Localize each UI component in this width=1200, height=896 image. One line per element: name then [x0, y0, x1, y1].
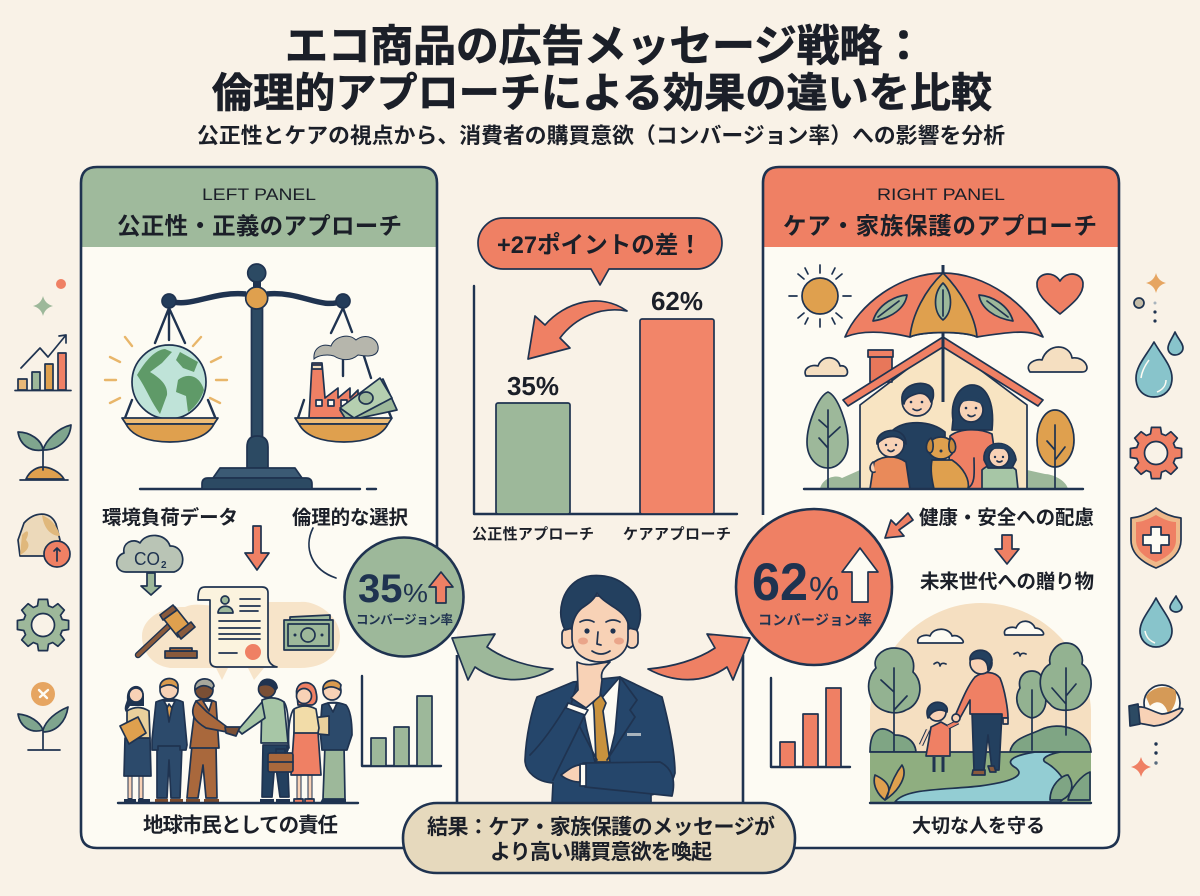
callout: result: 結果：ケア・家族保護のメッセージが: [427, 815, 775, 839]
icon: map with rate: [18, 514, 70, 567]
arrow: down to document: [245, 526, 269, 570]
speech blob: [142, 602, 340, 680]
bar: care 62%: [640, 286, 714, 514]
clouds: [805, 347, 1087, 376]
label: ethical choice: 倫理的な選択: [292, 507, 408, 529]
scale stand: [140, 264, 376, 489]
panel header: justice: LEFT PANEL: [202, 185, 316, 204]
label: environmental data: 環境負荷データ: [102, 506, 238, 529]
arrow: curved difference: [528, 301, 627, 359]
illustration: balance scale: [105, 264, 397, 489]
father: [893, 383, 945, 489]
label: health and safety: 健康・安全への配慮: [919, 507, 1094, 529]
icon: CO2 cloud: CO: [134, 549, 160, 569]
center bar chart: [472, 218, 737, 543]
icon: hand holding earth: [1129, 685, 1183, 726]
panel header: care: ケア・家族保護のアプローチ: [783, 213, 1097, 239]
label: protect loved ones: 大切な人を守る: [912, 815, 1045, 837]
title: 倫理的アプローチによる効果の違いを比較: [212, 70, 992, 116]
girl: [921, 702, 958, 772]
icon: gavel: [138, 605, 197, 658]
icon: orange dot and sprout: [18, 682, 68, 750]
arrow: toward 62 percent badge: [885, 513, 913, 538]
icon: water drops small: [1140, 596, 1182, 647]
person 2: [152, 679, 187, 803]
icon: health shield: [1131, 508, 1181, 568]
axis label: justice: 公正性アプローチ: [472, 526, 594, 543]
arm crossed: [530, 703, 674, 796]
person 4: [238, 678, 293, 803]
title: エコ商品の広告メッセージ戦略：: [285, 23, 925, 71]
mother: [948, 385, 1000, 489]
badge: 62 percent conversion: %: [809, 570, 839, 607]
icon: sparkle and dots top: [1134, 273, 1166, 323]
icon: sun: [789, 265, 851, 327]
right side icons: [1129, 273, 1183, 777]
person 5: [288, 683, 321, 803]
chart: small red bars: [771, 678, 850, 767]
icon: water drops: [1136, 332, 1183, 397]
son: [870, 430, 910, 489]
title: [212, 23, 992, 116]
bar: justice 35%: [496, 371, 570, 514]
badge: 35 percent conversion: [344, 538, 464, 656]
badge: 62 percent conversion: コンバージョン率: [758, 612, 872, 628]
icon: decorative dot and sparkle: [33, 279, 66, 316]
icon: CO2 cloud: [117, 535, 183, 595]
house: [843, 337, 1043, 489]
callout: result: [403, 803, 795, 873]
person 6: [312, 680, 352, 803]
panel: care approach: [736, 167, 1119, 848]
icon: CO2 cloud: 2: [161, 560, 167, 571]
callout: 27 point difference: +27ポイントの差！: [497, 232, 702, 259]
panel header: care: [763, 167, 1119, 247]
label: global citizen responsibility: 地球市民としての責任: [143, 814, 338, 837]
person 1: [120, 686, 151, 803]
family: [870, 383, 1018, 489]
illustration: thoughtful businessman: [525, 576, 675, 803]
icon: green gear: [17, 599, 69, 651]
background birds and clouds: [918, 621, 1044, 666]
chart: small green bars: [362, 676, 441, 766]
arrow: down to future generations: [995, 535, 1019, 564]
umbrella: [845, 265, 1043, 402]
jacket: [525, 677, 675, 803]
panel header: justice: 公正性・正義のアプローチ: [117, 213, 402, 239]
person 3: [186, 679, 240, 803]
panel: justice approach: [81, 167, 464, 848]
callout: 27 point difference: [478, 218, 722, 285]
badge: 35 percent conversion: %: [403, 578, 428, 608]
icon: document: [198, 587, 277, 667]
arrow: businessman to justice badge: [452, 634, 553, 680]
hand on chin: [566, 662, 610, 715]
trees and bushes: [807, 392, 1074, 489]
trees: [869, 643, 1091, 752]
shirt and tie: [570, 677, 641, 762]
left pan with globe: [105, 308, 227, 442]
icon: growth chart: [15, 335, 71, 390]
badge: 62 percent conversion: [736, 509, 892, 665]
label: gift to future generations: 未来世代への贈り物: [920, 571, 1094, 593]
subtitle: 公正性とケアの視点から、消費者の購買意欲（コンバージョン率）への影響を分析: [197, 123, 1005, 148]
panel header: justice: [81, 167, 437, 247]
meadow and river: [870, 752, 1091, 802]
badge: 35 percent conversion: 35: [358, 567, 402, 611]
callout: result: より高い購買意欲を喚起: [490, 841, 712, 864]
illustration: parent and child in park: [869, 603, 1091, 803]
icon: heart: [1037, 274, 1083, 314]
axis label: care: ケアアプローチ: [623, 526, 731, 543]
icon: banknote: [284, 615, 333, 650]
illustration: law, contract and money: [138, 587, 340, 680]
panel header: care: RIGHT PANEL: [877, 185, 1005, 204]
bar: care 62%: 62%: [651, 286, 703, 316]
icon: dots and sparkle bottom: [1131, 742, 1158, 777]
illustration: diverse citizens shaking hands: [118, 678, 358, 803]
left side icons: [15, 279, 71, 750]
icon: sprout: [18, 425, 71, 480]
bar: justice 35%: 35%: [507, 371, 559, 401]
axes: [474, 286, 737, 514]
connector: ethical choice to rate: [309, 528, 336, 578]
badge: 62 percent conversion: 62: [752, 553, 808, 612]
daughter: [982, 444, 1018, 489]
dog: [926, 437, 974, 489]
right pan with factory and money: [295, 308, 397, 442]
illustration: family under umbrella: [789, 265, 1087, 489]
arrow: businessman to care badge: [648, 634, 750, 680]
badge: 35 percent conversion: コンバージョン率: [356, 612, 453, 627]
father walking: [952, 650, 1008, 775]
icon: red gear: [1130, 427, 1182, 479]
head: [561, 576, 640, 662]
